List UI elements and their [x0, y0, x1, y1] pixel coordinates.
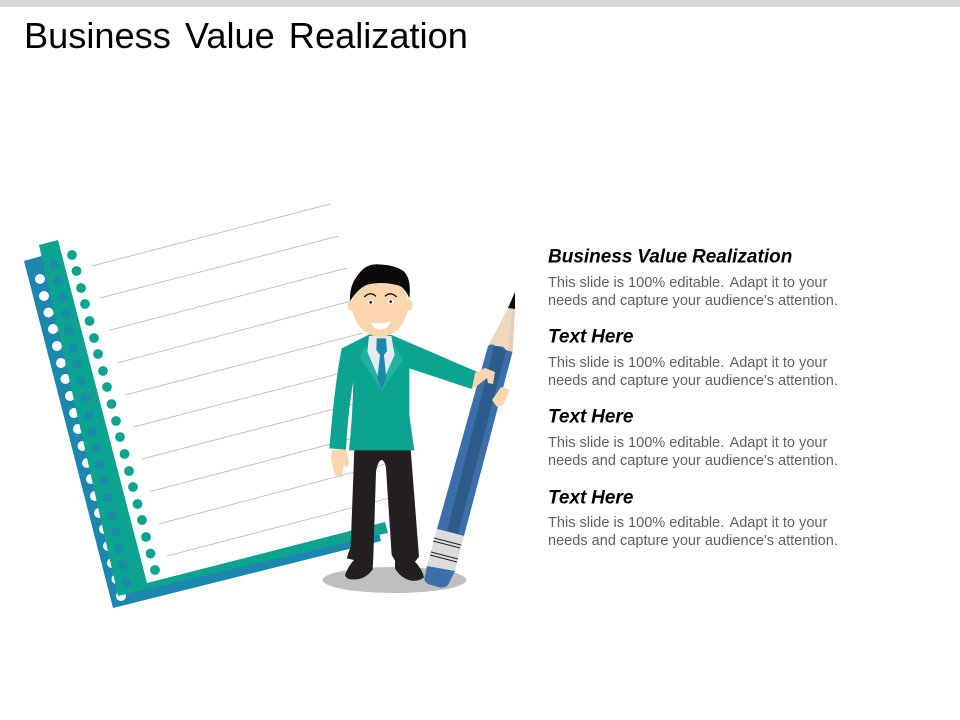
- teal binding dots: [67, 250, 160, 575]
- shirt: [367, 336, 395, 379]
- white binding holes: [35, 274, 126, 601]
- text block: Business Value Realization: This slide is 100% editable. Adapt it to your: [548, 275, 828, 291]
- blue back strip: [24, 255, 381, 608]
- text block: Business Value Realization: Business Value Realization: [548, 246, 792, 268]
- text block: Text Here 2: needs and capture your audience's attention.: [548, 453, 838, 469]
- text block: Text Here 2: This slide is 100% editable. Adapt it to your: [548, 435, 828, 451]
- text block: Text Here 2: Text Here: [548, 406, 634, 428]
- wood cone: [488, 308, 515, 352]
- pencil body: [437, 344, 512, 536]
- text block: Business Value Realization: needs and capture your audience's attention.: [548, 293, 838, 309]
- face: [352, 273, 408, 337]
- text block: Text Here 3: needs and capture your audience's attention.: [548, 533, 838, 549]
- text block: Text Here 3: Text Here: [548, 488, 634, 508]
- left hand: [331, 449, 349, 477]
- eraser band: [427, 529, 464, 571]
- text block: Text Here 3: [548, 488, 838, 549]
- jacket: [329, 334, 477, 450]
- notebook illustration: [24, 204, 405, 608]
- hair: [350, 264, 410, 301]
- text block: Text Here 2: [548, 406, 838, 469]
- teal front strip: [39, 240, 388, 596]
- gripping hand: [472, 368, 510, 407]
- text block: Text Here 3: This slide is 100% editable. Adapt it to your: [548, 515, 828, 531]
- text block: Text Here 1: This slide is 100% editable. Adapt it to your: [548, 355, 828, 371]
- blue shadow dots: [49, 259, 132, 587]
- smile: [371, 321, 391, 330]
- lapels: [360, 345, 403, 390]
- neck: [369, 327, 391, 344]
- trousers and shoes: [331, 449, 424, 581]
- text block: Text Here 1: Text Here: [548, 326, 634, 348]
- pencil: [424, 292, 515, 588]
- ears: [347, 299, 355, 311]
- text block: Text Here 1: needs and capture your audience's attention.: [548, 373, 838, 389]
- tie: [376, 338, 387, 388]
- text block: Business Value Realization: [548, 246, 838, 309]
- businessman figure: [329, 264, 477, 581]
- eraser: [424, 566, 455, 588]
- notebook ruled lines: [92, 204, 405, 556]
- pencil dark stripe: [447, 346, 506, 534]
- eraser band stripes: [430, 538, 461, 562]
- graphite tip: [508, 292, 515, 309]
- text block: Text Here 1: [548, 326, 838, 389]
- brows and eyes: [364, 294, 397, 297]
- title: Business Value Realization: [24, 15, 468, 56]
- ground shadow: [322, 567, 466, 593]
